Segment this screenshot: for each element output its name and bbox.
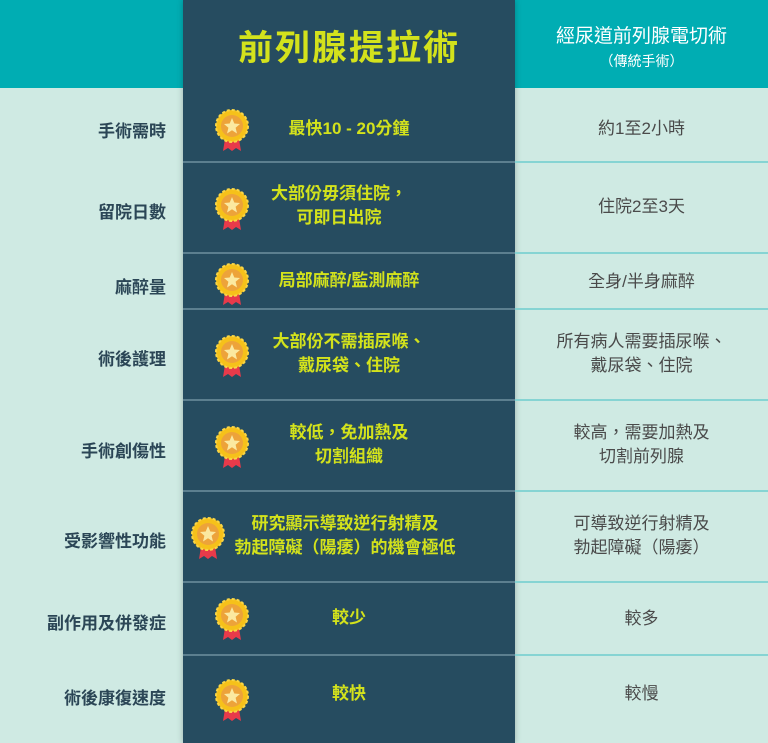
title: traditional column: 經尿道前列腺電切術 [556,26,727,47]
icon: medal [191,517,225,559]
row 1: 最快10 - 20分鐘 [289,119,409,138]
row 1: 約1至2小時 [598,119,685,138]
row 3: 麻醉量 [115,278,166,297]
row 6: 研究顯示導致逆行射精及 [252,514,438,533]
row 4: 大部份不需插尿喉、 [272,332,426,351]
row 6: 可導致逆行射精及 [574,514,710,533]
row 3: 局部麻醉/監測麻醉 [279,271,419,290]
row 8: 術後康復速度 [64,689,166,708]
icon: medal [215,335,249,377]
row 6: 勃起障礙（陽痿）的機會極低 [234,538,456,557]
row 4: 所有病人需要插尿喉、 [556,332,726,351]
row 4: 戴尿袋、住院 [298,356,400,375]
row 1 [98,109,685,151]
row 8: 較慢 [624,684,658,703]
icon: medal [215,679,249,721]
row 3 [115,263,695,305]
row 7: 較少 [332,608,366,627]
row 2: 留院日數 [98,203,166,222]
row 4: 戴尿袋、住院 [590,356,692,375]
row 7: 較多 [624,609,658,628]
row 6: 勃起障礙（陽痿） [574,538,710,557]
row 5: 手術創傷性 [81,442,166,461]
row 8 [64,679,658,721]
icon: medal [215,109,249,151]
row 5: 較低，免加熱及 [290,423,408,442]
icon: medal [215,426,249,468]
header band [0,0,768,88]
row 5: 切割組織 [315,447,383,466]
row 5: 較高，需要加熱及 [574,423,710,442]
icon: medal [215,263,249,305]
row 2: 住院2至3天 [598,197,685,216]
row 1: 手術需時 [98,122,166,141]
middle column background [183,0,515,743]
row 5 [81,423,710,468]
row 2: 大部份毋須住院， [271,184,407,203]
row 2: 可即日出院 [296,208,382,227]
row 6 [64,514,710,559]
title: traditional column [556,26,727,69]
row 2 [98,184,685,230]
icon: medal [215,188,249,230]
row 7 [47,598,658,640]
row 4: 術後護理 [98,350,166,369]
row 4 [98,332,726,377]
row 3: 全身/半身麻醉 [588,272,695,291]
title: traditional column: （傳統手術） [600,53,684,69]
row 7: 副作用及併發症 [47,614,166,633]
title: main column: 前列腺提拉術 [238,29,460,68]
row 8: 較快 [332,684,366,703]
row 5: 切割前列腺 [599,447,684,466]
row 6: 受影響性功能 [64,532,166,551]
icon: medal [215,598,249,640]
